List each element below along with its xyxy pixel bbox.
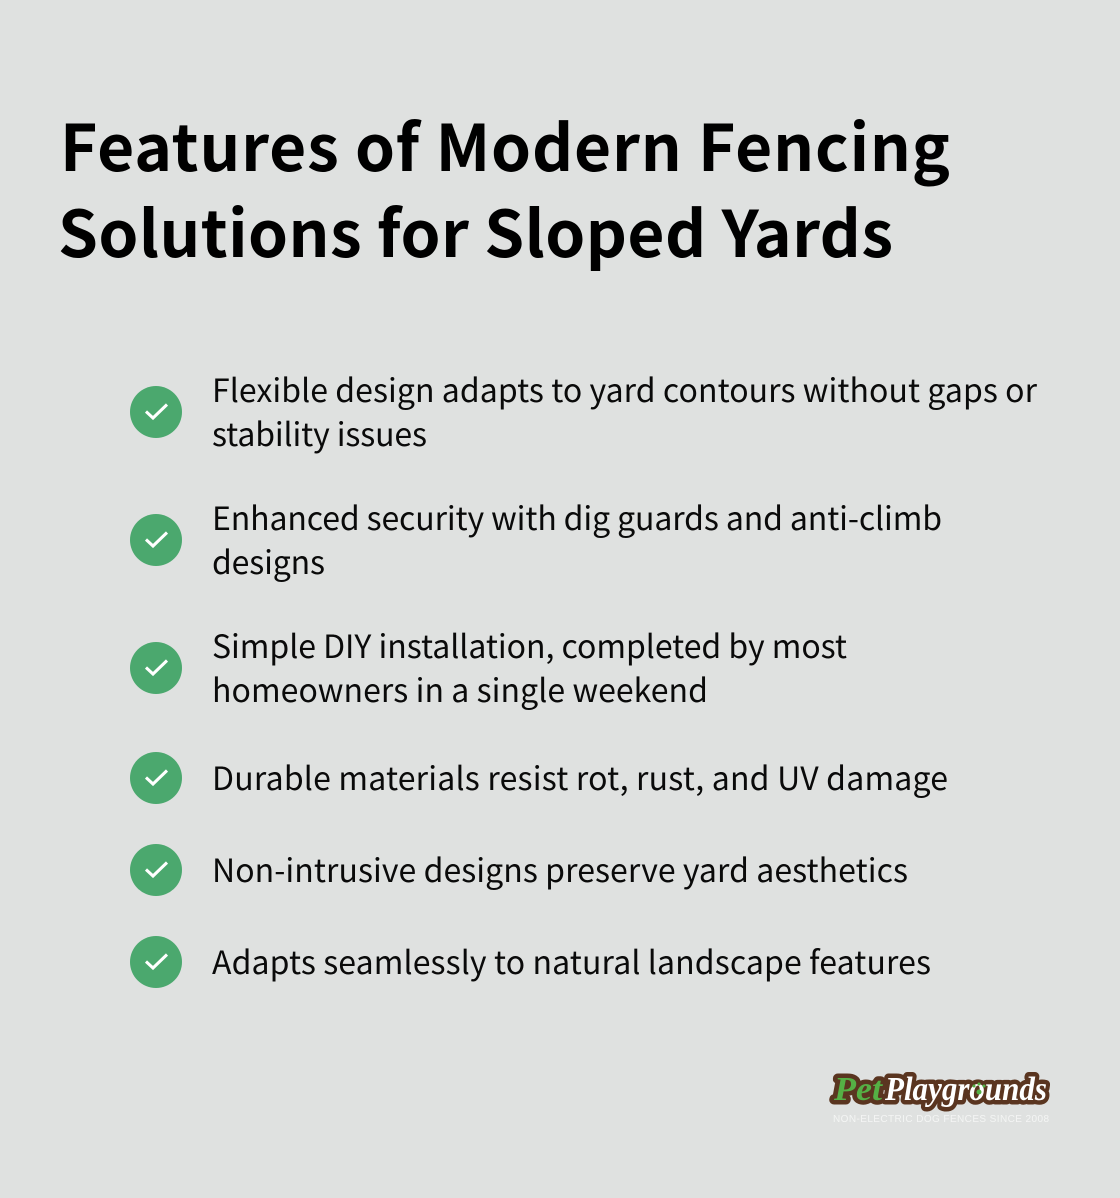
- logo wordmark: Playgrounds: [884, 1071, 1047, 1108]
- feature 2 text: [212, 494, 942, 584]
- feature 2: [130, 494, 942, 584]
- feature 3 text: homeowners in a single weekend: [212, 666, 708, 712]
- icon: check 5: [130, 844, 182, 896]
- icon: paw in the letter o: [972, 1082, 986, 1094]
- title: [58, 98, 950, 276]
- feature 1 text: Flexible design adapts to yard contours without gaps or: [212, 366, 1038, 412]
- feature 3: [130, 622, 847, 712]
- feature 4: [130, 752, 948, 804]
- feature 3 text: Simple DIY installation, completed by most: [212, 622, 847, 668]
- feature 5 text: Non-intrusive designs preserve yard aesthetics: [212, 846, 908, 892]
- icon: check 1: [130, 386, 182, 438]
- title: Features of Modern Fencing: [60, 98, 950, 190]
- feature 5: [130, 844, 908, 896]
- feature 4 text: Durable materials resist rot, rust, and UV damage: [212, 754, 948, 800]
- feature 2 text: Enhanced security with dig guards and anti-climb: [212, 494, 942, 540]
- title: Solutions for Sloped Yards: [58, 184, 893, 276]
- icon: check 4: [130, 752, 182, 804]
- feature 1 text: stability issues: [212, 410, 427, 456]
- logo wordmark: Pet: [833, 1071, 884, 1108]
- logo: Pet Playgrounds: [833, 1071, 1049, 1125]
- icon: check 2: [130, 514, 182, 566]
- feature 6: [130, 936, 931, 988]
- icon: check 3: [130, 642, 182, 694]
- icon: check 6: [130, 936, 182, 988]
- feature 2 text: designs: [212, 538, 325, 584]
- logo wordmark: Playgrounds: [884, 1071, 1047, 1108]
- feature 1 text: [212, 366, 1038, 456]
- logo wordmark: Pet: [833, 1071, 884, 1108]
- feature 3 text: [212, 622, 847, 712]
- feature 6 text: Adapts seamlessly to natural landscape features: [212, 938, 931, 984]
- logo tagline: NON-ELECTRIC DOG FENCES SINCE 2008: [833, 1114, 1049, 1125]
- feature 1: [130, 366, 1038, 456]
- feature list: [130, 366, 1038, 988]
